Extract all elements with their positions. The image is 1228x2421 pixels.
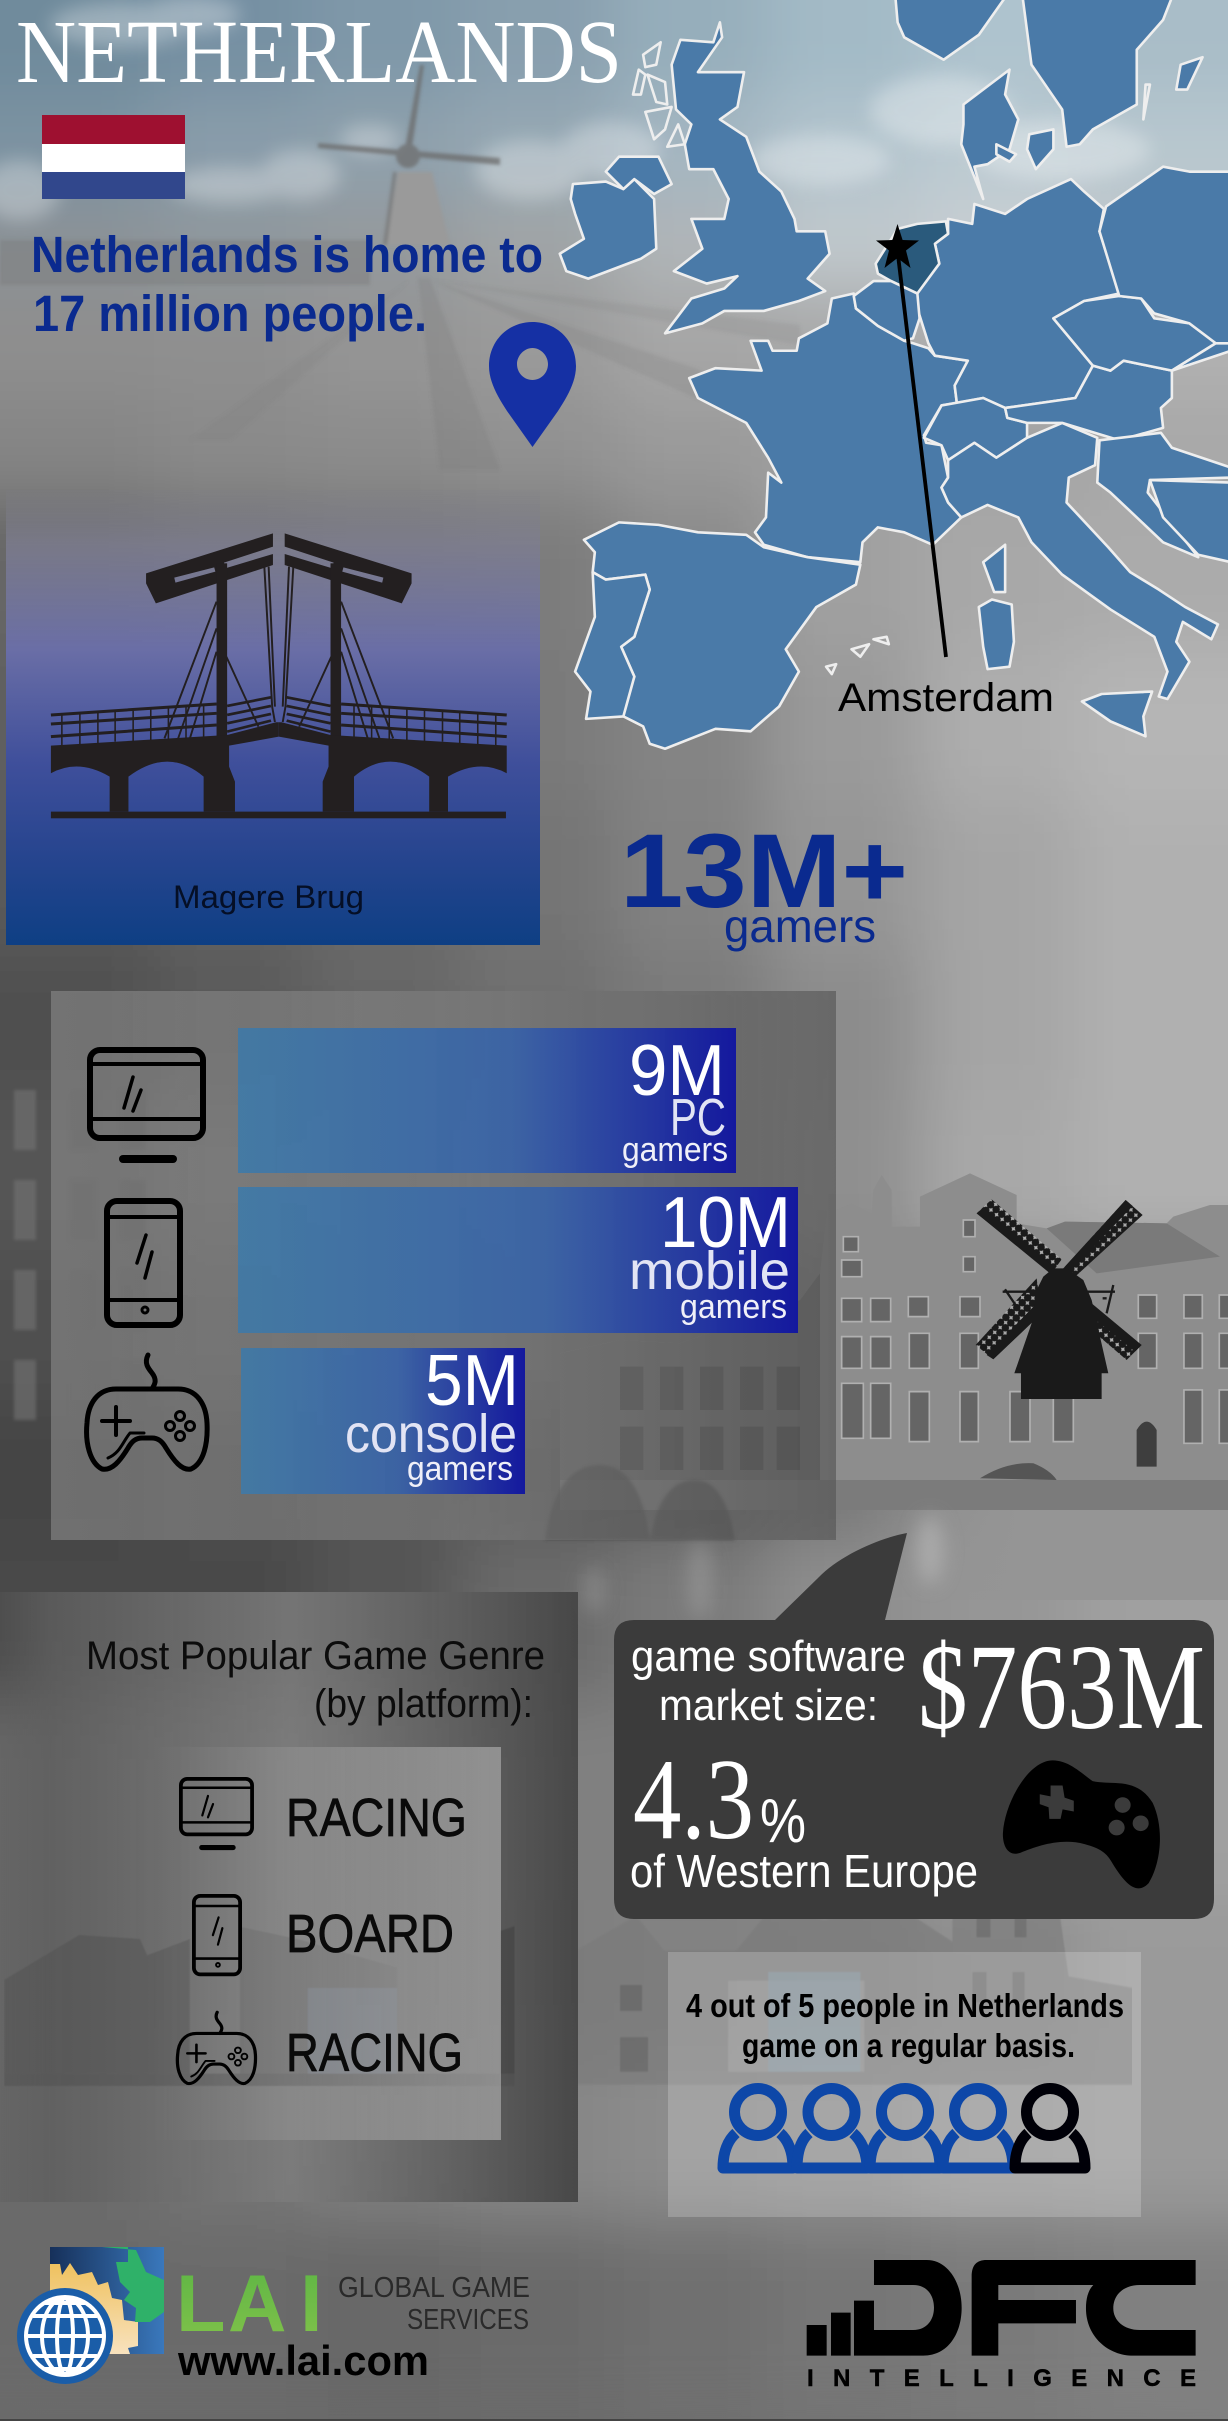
population statement: Netherlands is home to <box>31 226 543 283</box>
13M+ gamers stat: 13M+ <box>620 813 908 930</box>
bar: PC gamers <box>238 1028 736 1173</box>
genre heading <box>86 1634 545 1726</box>
icon: blue people <box>723 2088 1013 2168</box>
bar: mobile gamers <box>238 1183 798 1333</box>
population statement <box>31 226 543 342</box>
population statement: 17 million people. <box>33 285 427 342</box>
callout: game software market size: % <box>760 1787 806 1856</box>
icon: gamepad <box>1003 1760 1160 1888</box>
PC genre: racing: RACING <box>286 1788 467 1848</box>
callout: game software market size <box>614 1533 1214 1919</box>
icon: phone <box>107 1201 180 1325</box>
panel: 4 out of 5 people <box>668 1952 1141 2217</box>
bar: PC gamers: PC <box>670 1089 726 1147</box>
bar: console gamers: console <box>345 1404 517 1464</box>
icon: bridge <box>51 533 507 818</box>
bar: console gamers <box>241 1341 525 1494</box>
logo: DFC Intelligence <box>807 2260 1196 2392</box>
bar: PC gamers: gamers <box>622 1131 728 1169</box>
logo: DFC Intelligence: INTELLIGENCE <box>807 2365 1196 2392</box>
genre heading: Most Popular Game Genre <box>86 1634 545 1678</box>
bar: PC gamers: 9M <box>629 1031 725 1111</box>
panel: 4 out of 5 people: game on a regular basis. <box>742 2027 1075 2064</box>
callout: game software market size: game software <box>631 1632 906 1681</box>
logo: LAI Global Game Services: GLOBAL GAME <box>338 2272 530 2304</box>
title: NETHERLANDS <box>16 3 622 102</box>
console genre: racing: RACING <box>286 2023 463 2083</box>
icon: monitor small <box>181 1779 252 1848</box>
panel: most popular game genre <box>0 1592 578 2202</box>
logo: LAI Global Game Services: LAI <box>176 2259 323 2349</box>
icon: phone small <box>194 1896 240 1974</box>
panel: 4 out of 5 people: 4 out of 5 people in Netherlands <box>686 1987 1124 2024</box>
map of western Europe <box>560 0 1228 749</box>
icon: star on Amsterdam <box>876 224 919 268</box>
bar: console gamers: 5M <box>425 1341 519 1421</box>
icon: Dutch flag <box>42 115 185 199</box>
mobile genre: board: BOARD <box>286 1904 454 1964</box>
logo: LAI Global Game Services: www.lai.com <box>177 2337 429 2384</box>
logo: LAI Global Game Services <box>18 2247 530 2384</box>
13M+ gamers stat: gamers <box>724 900 876 952</box>
icon: map pin <box>489 322 576 447</box>
genre heading: (by platform): <box>314 1682 533 1726</box>
genre list card <box>151 1747 501 2140</box>
panel: gamers by platform <box>51 991 836 1540</box>
callout: game software market size: of Western Europe <box>630 1845 978 1897</box>
icon: game controller <box>87 1355 207 1469</box>
bar: mobile gamers: 10M <box>660 1183 791 1263</box>
icon: black person <box>1015 2088 1085 2168</box>
bar: mobile gamers: gamers <box>680 1288 787 1326</box>
panel: Magere Brug <box>6 490 540 945</box>
bridge caption: Magere Brug <box>173 879 364 915</box>
logo: LAI Global Game Services: SERVICES <box>407 2304 529 2336</box>
callout: game software market size: 4.3 <box>633 1736 754 1864</box>
bar: console gamers: gamers <box>407 1450 513 1488</box>
icon: controller small <box>177 2012 256 2084</box>
callout: game software market size: market size: <box>659 1681 878 1730</box>
Amsterdam pointer line <box>898 255 946 657</box>
Amsterdam label: Amsterdam <box>838 676 1054 720</box>
icon: monitor <box>90 1050 203 1159</box>
bar: mobile gamers: mobile <box>629 1241 790 1301</box>
icon: black windmill <box>976 1199 1143 1399</box>
